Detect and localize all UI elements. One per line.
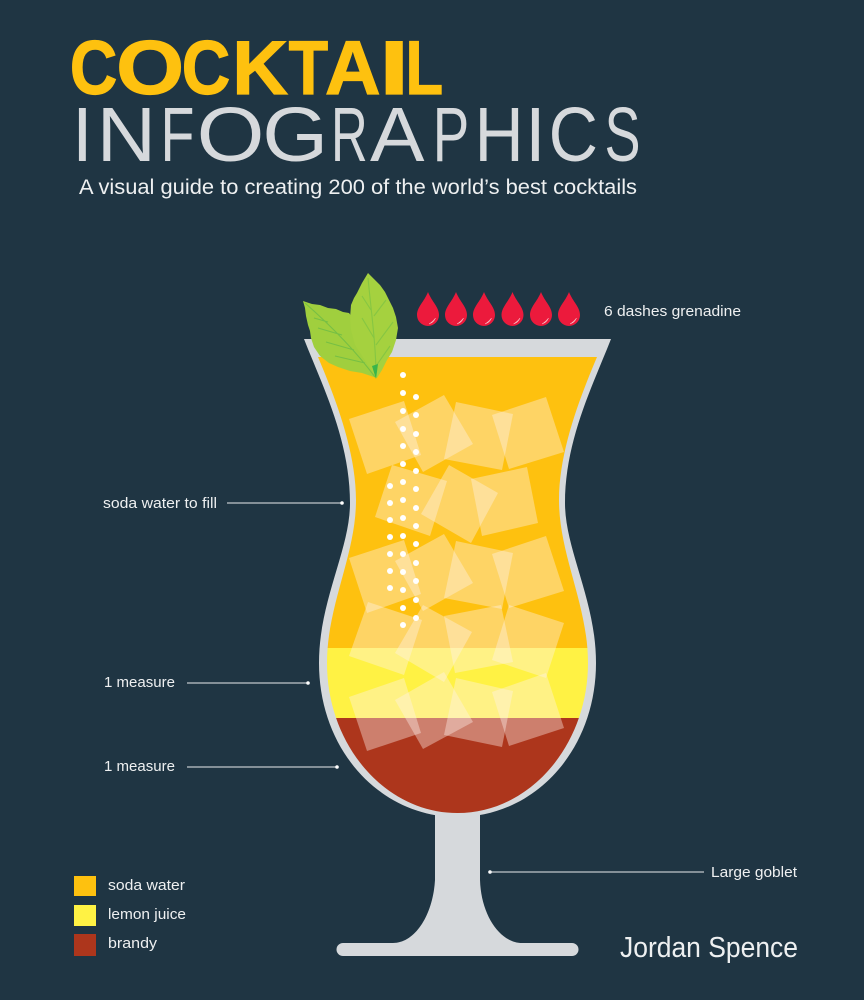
callout: brandy measure: 1 measure bbox=[104, 759, 175, 775]
layer: lemon juice bbox=[327, 648, 588, 718]
title: Infographics: N bbox=[97, 92, 156, 178]
soda bubbles bbox=[387, 372, 419, 628]
legend bbox=[74, 876, 186, 956]
label: grenadine: 6 dashes grenadine bbox=[604, 304, 741, 320]
callout: soda water to fill: soda water to fill bbox=[103, 496, 217, 512]
callout: lemon juice measure: 1 measure bbox=[104, 675, 175, 691]
title: Infographics: R bbox=[331, 92, 368, 178]
legend: brandy: brandy bbox=[108, 936, 158, 952]
title: Cocktail: L bbox=[406, 26, 443, 111]
title: Infographics: G bbox=[262, 92, 328, 178]
callout: soda water to fill bbox=[103, 496, 344, 512]
subtitle: A visual guide to creating 200 of the world’s best cocktails bbox=[79, 176, 637, 199]
author: Jordan Spence bbox=[620, 932, 798, 964]
icon: mint leaves bbox=[303, 273, 398, 379]
legend: soda water: soda water bbox=[108, 878, 185, 894]
title: Infographics: I bbox=[525, 92, 546, 178]
callout: large goblet bbox=[488, 865, 797, 881]
title: Infographics: H bbox=[475, 92, 524, 178]
callout: brandy measure bbox=[104, 759, 339, 775]
ice cubes bbox=[349, 395, 564, 751]
title: Infographics: O bbox=[197, 92, 264, 178]
callout: large goblet: Large goblet bbox=[711, 865, 797, 881]
title: Cocktail: C bbox=[182, 26, 230, 111]
title: Cocktail: K bbox=[232, 26, 288, 111]
title: Cocktail: C bbox=[70, 26, 117, 111]
liquid layers bbox=[318, 357, 597, 813]
title: Cocktail: I bbox=[379, 26, 409, 111]
legend: lemon juice: lemon juice bbox=[108, 907, 186, 923]
layer: soda water bbox=[318, 357, 597, 648]
infographic canvas bbox=[72, 40, 797, 963]
title: Cocktail: T bbox=[289, 26, 328, 111]
callout: lemon juice measure bbox=[104, 675, 310, 691]
goblet glass bbox=[304, 339, 611, 956]
layer: brandy bbox=[336, 718, 579, 813]
title: Infographics: P bbox=[433, 92, 469, 178]
title: Cocktail: O bbox=[116, 26, 184, 111]
title: Infographics: F bbox=[160, 92, 194, 178]
title: Infographics: I bbox=[72, 92, 93, 178]
title: Infographics: A bbox=[370, 92, 425, 178]
title: Infographics: C bbox=[549, 92, 598, 178]
title: Infographics: S bbox=[604, 92, 640, 178]
title: Cocktail: A bbox=[325, 26, 381, 111]
icon: grenadine drops bbox=[417, 292, 580, 326]
